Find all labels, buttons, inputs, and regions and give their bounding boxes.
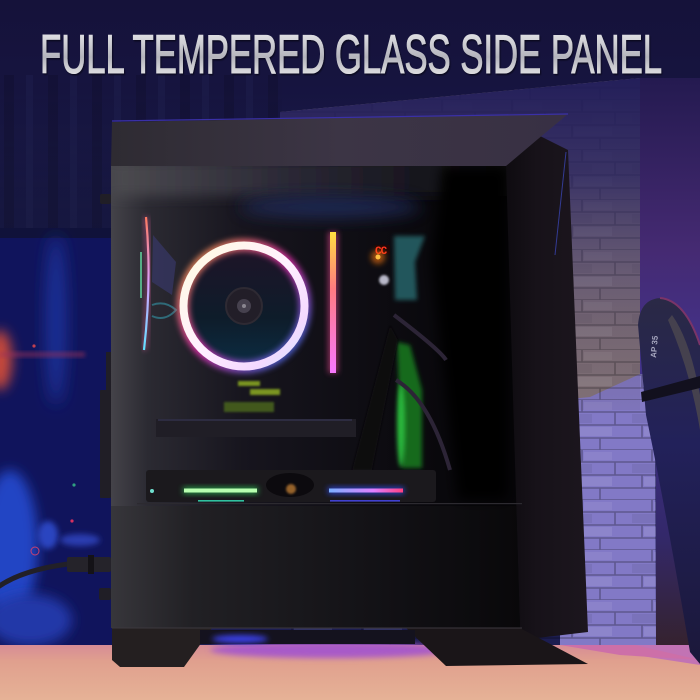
teal and green interior glow <box>352 236 450 470</box>
table <box>0 642 700 700</box>
front panel <box>495 136 588 640</box>
fan hub <box>226 288 262 324</box>
glass side panel <box>111 160 521 631</box>
graphics card <box>156 419 356 437</box>
right purple wall <box>640 78 700 650</box>
left rear fan <box>141 217 176 350</box>
case feet <box>112 628 588 667</box>
dark right interior <box>432 166 508 500</box>
power supply shroud with RGB fans <box>137 470 522 504</box>
motherboard debug LED and indicators: CC <box>375 246 388 258</box>
rear case brackets and thumbscrews <box>99 194 112 600</box>
monitor with nebula wallpaper <box>0 226 112 646</box>
motherboard debug LED and indicators <box>371 245 390 285</box>
top panel <box>111 114 568 166</box>
front panel blue edge light <box>555 152 566 255</box>
CPU cooler RGB ring fan <box>183 245 305 367</box>
vertical RGB light bar <box>328 232 338 373</box>
gaming chair <box>638 298 700 664</box>
blue and pink light strip <box>328 487 404 494</box>
green light strip <box>183 487 258 494</box>
stone wall <box>280 78 656 645</box>
cable and connector <box>0 555 111 587</box>
chair logo: AP 35 <box>649 335 660 358</box>
PC case <box>111 114 588 640</box>
VRM and chipset green highlights <box>224 381 280 412</box>
